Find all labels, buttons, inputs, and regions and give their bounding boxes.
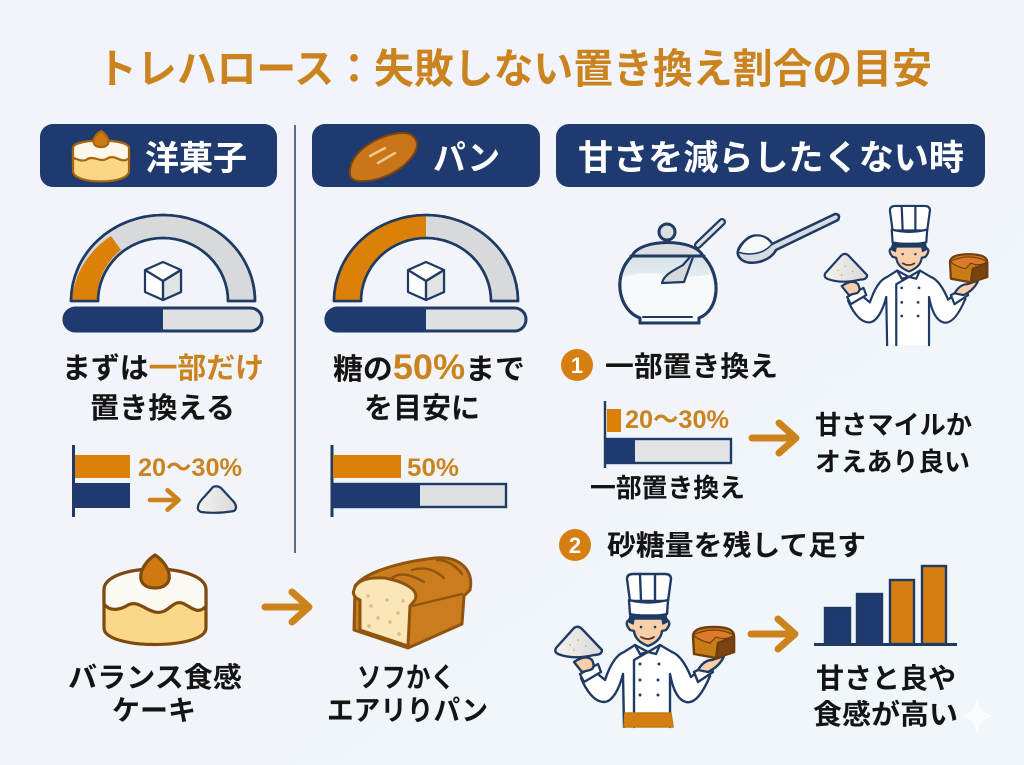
heading: 洋菓子 xyxy=(40,124,277,187)
text: 糖の50%までを目安に: 糖の50%まで xyxy=(333,348,525,387)
badge 2 xyxy=(559,529,591,561)
text: ソフかくエアリりパン: ソフかく xyxy=(357,662,455,693)
icon: spoon xyxy=(738,214,839,263)
progress bar: half xyxy=(324,307,526,332)
icon: sugar cube xyxy=(408,262,444,300)
vertical divider xyxy=(294,125,296,553)
bar chart: 50%: 50% xyxy=(407,454,459,482)
text: ソフかくエアリりパン xyxy=(327,662,488,726)
icon: chef with sugar and bread xyxy=(825,206,987,345)
gauge: 20-30% xyxy=(71,215,255,301)
panel: パン column xyxy=(312,124,540,517)
badge 1 xyxy=(561,349,593,381)
text: 糖の50%までを目安に: を目安に xyxy=(364,392,480,425)
panel: 洋菓子 column xyxy=(40,124,277,517)
gauge: 50% xyxy=(334,215,518,301)
arrow: cake to bread xyxy=(265,592,309,622)
heading: パン xyxy=(312,124,540,187)
text: result 2: 食感が高い xyxy=(813,698,958,730)
bar chart: partial replacement xyxy=(590,401,745,503)
step 1 xyxy=(561,349,778,382)
text: result 1: オえあり良い xyxy=(815,447,970,477)
icon: cake xyxy=(104,555,206,644)
text: バランス食感ケーキ: ケーキ xyxy=(112,695,196,726)
panel: 甘さを減らしたくない時 xyxy=(555,124,987,730)
bar chart: partial replacement: 20〜30% xyxy=(625,406,729,434)
step 2 xyxy=(559,529,866,561)
icon: sugar pile xyxy=(198,486,236,513)
text: 洋菓子: 洋菓子 xyxy=(145,140,247,178)
text: result 1: 甘さマイルか xyxy=(815,410,972,440)
heading xyxy=(556,124,985,187)
arrow xyxy=(751,619,795,649)
text: result 1 xyxy=(815,410,972,477)
badge 2: 2 xyxy=(569,533,581,558)
icon: sugar bowl xyxy=(620,222,722,323)
text: まずは一部だけ置き換える xyxy=(62,352,264,425)
bar chart: 50% xyxy=(332,445,506,517)
text: バランス食感ケーキ xyxy=(68,662,242,726)
step 2 label: 砂糖量を残して足す xyxy=(607,530,866,561)
icon: sugar cube xyxy=(145,262,181,300)
badge 1: 1 xyxy=(571,353,583,378)
bar chart: 20〜30% xyxy=(74,445,242,517)
text: パン: パン xyxy=(433,140,500,178)
text: result 2 xyxy=(813,663,958,730)
title: トレハロース：失敗しない置き換え割合の目安 xyxy=(97,46,932,92)
text: まずは一部だけ置き換える: 置き換える xyxy=(90,392,235,425)
heading: 甘さを減らしたくない時 xyxy=(578,139,964,178)
step 1 label: 一部置き換え xyxy=(605,351,778,382)
icon: chef with apron xyxy=(555,574,734,727)
text: まずは一部だけ置き換える: まずは一部だけ xyxy=(62,352,264,385)
arrow xyxy=(752,423,796,453)
icon: small bread xyxy=(350,133,417,181)
text: バランス食感ケーキ: バランス食感 xyxy=(68,662,242,693)
text: result 2: 甘さと良や xyxy=(816,663,956,694)
bar chart: 20〜30%: 20〜30% xyxy=(138,454,242,482)
text: ソフかくエアリりパン: エアリりパン xyxy=(327,695,488,726)
icon: bread loaf xyxy=(353,558,471,648)
bar chart: partial replacement: 一部置き換え xyxy=(590,473,745,503)
icon: sparkle xyxy=(959,698,995,734)
text: 糖の50%までを目安に xyxy=(333,348,525,425)
progress bar: half xyxy=(62,307,262,332)
icon: small cake xyxy=(73,131,129,182)
bar chart: rising xyxy=(814,566,957,644)
